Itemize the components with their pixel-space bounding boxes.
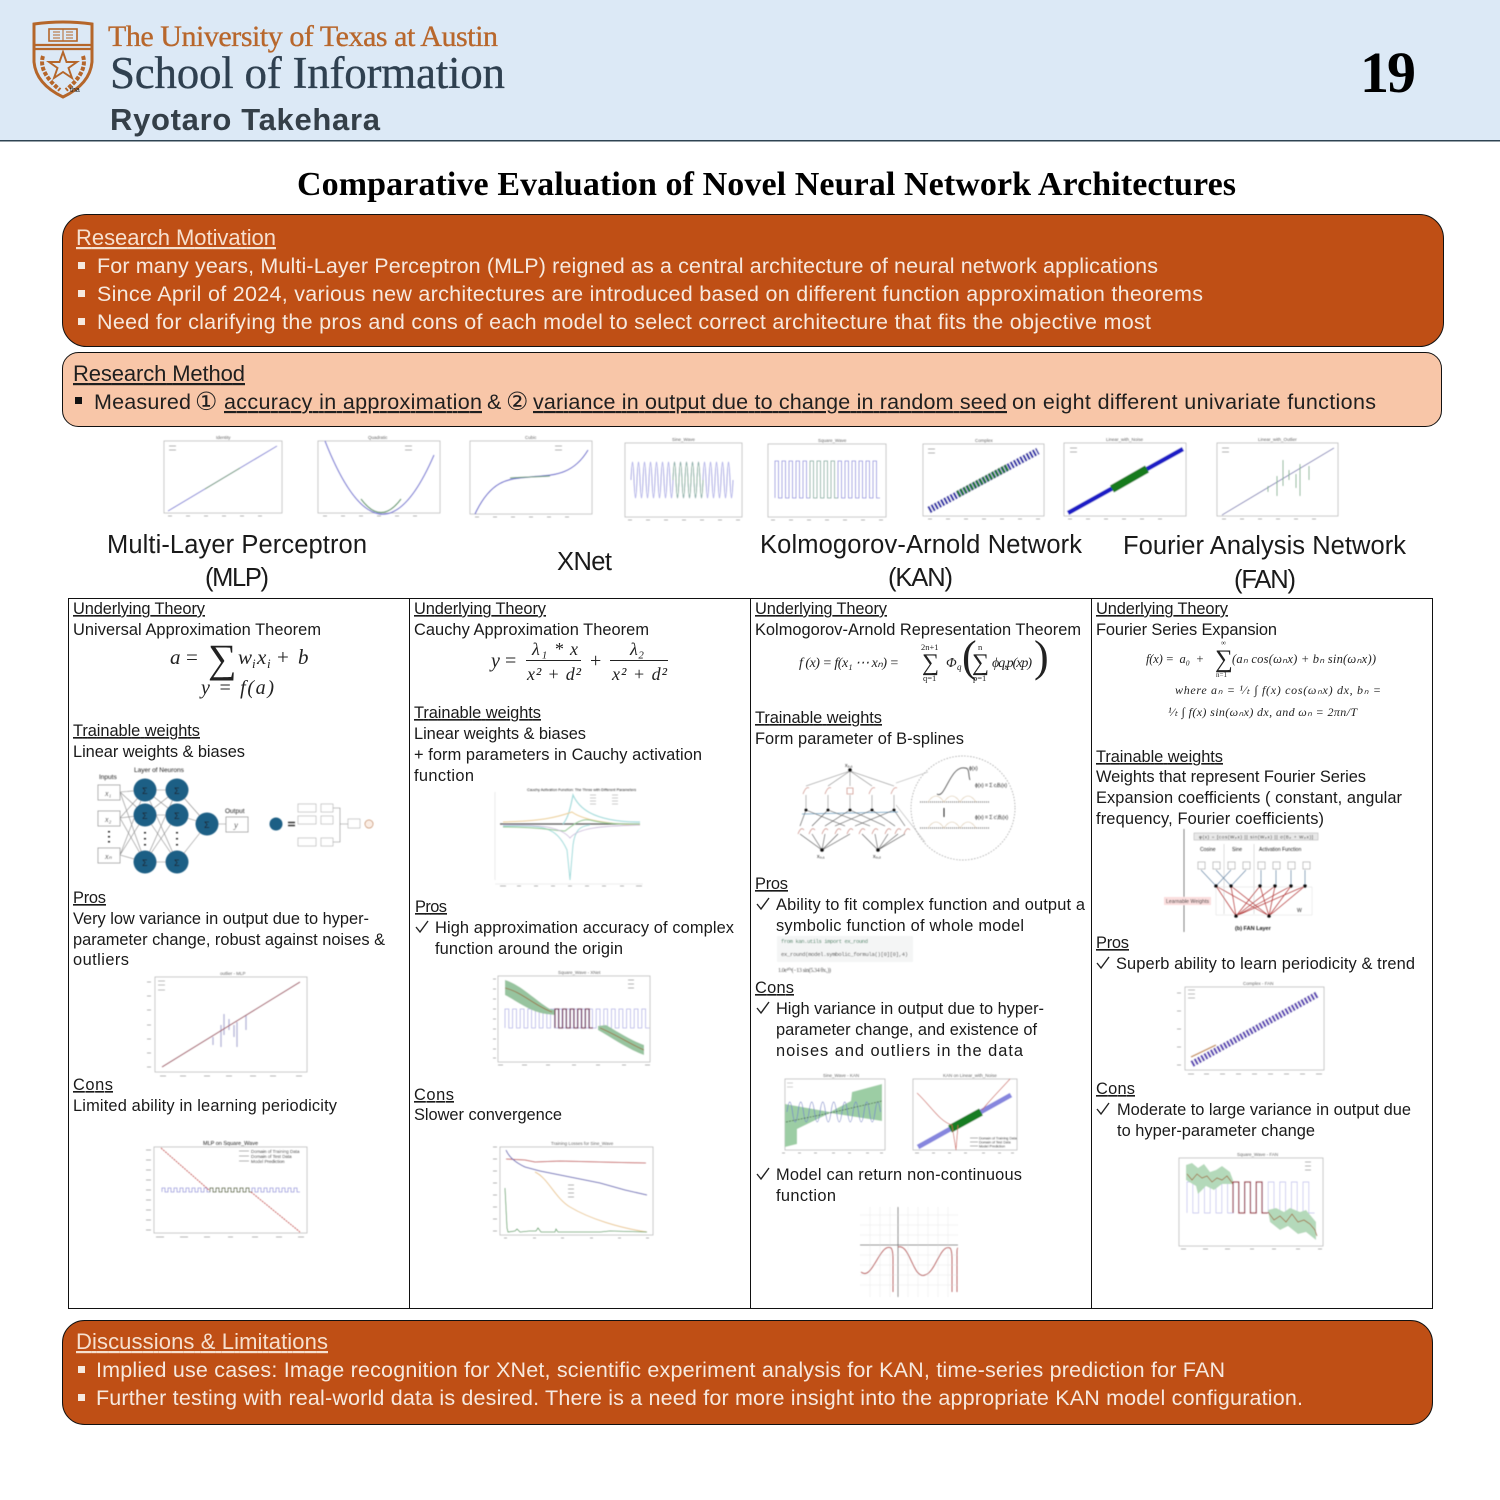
XNet trainable weights: Linear weights & biases — [414, 725, 586, 743]
chart: MLP on square wave: MLP on Square_Wave — [203, 1141, 258, 1147]
FAN trainable weights — [1096, 748, 1403, 828]
KAN formula: f (x) = f(x₁ ⋯ xₙ) = — [799, 656, 899, 671]
FAN underlying theory: Fourier Series Expansion — [1096, 621, 1277, 639]
method statement — [75, 387, 1376, 416]
FAN cons: to hyper-parameter change — [1117, 1122, 1315, 1140]
KAN trainable weights: Trainable weights — [755, 709, 882, 727]
diagram: KAN network with B-spline inset: x₀,₁ — [817, 854, 825, 860]
diagram: FAN layer: φ(x) = [cos(Wₚx) || sin(Wₚx) || σ(Bₚ + Wₚx)] — [1199, 834, 1313, 840]
FAN underlying theory — [1096, 600, 1277, 639]
diagram: MLP network: Σ — [142, 858, 148, 868]
code snippet: from kan.utils import ex_round — [781, 938, 868, 945]
method statement: ② — [506, 387, 528, 416]
chart: KAN on linear with noise: Domain of Training Data — [979, 1136, 1017, 1140]
method statement: Measured — [94, 390, 191, 414]
chart: complex FAN — [1177, 981, 1324, 1074]
KAN second con: Model can return non-continuous — [776, 1166, 1022, 1184]
KAN formula: p=1 — [973, 673, 986, 683]
chart: square wave: Square_Wave — [818, 438, 847, 443]
chart: sine wave — [625, 437, 742, 520]
KAN underlying theory — [755, 600, 1081, 639]
XNet formula: λ₂ — [629, 639, 644, 659]
bullet list: discussions: Implied use cases: Image recognition for XNet, scientific experiment analysis for KAN, time-series prediction for FAN — [96, 1358, 1225, 1382]
bullet list: motivation: Need for clarifying the pros and cons of each model to select correct architecture that fits the objective most — [97, 310, 1151, 334]
KAN formula: Φ — [946, 656, 957, 671]
code snippet: 1.0e¹⁰ˣ(−13 sin(5.34 θx₁)) — [778, 967, 831, 974]
MLP underlying theory — [73, 600, 321, 639]
diagram: KAN network with B-spline inset: ϕ(x) = Σ cᵢBᵢ(x) — [975, 783, 1007, 789]
KAN cons: noises and outliers in the data — [776, 1042, 1024, 1060]
XNet cons: Cons — [414, 1086, 454, 1104]
bullet list: motivation: For many years, Multi-Layer Perceptron (MLP) reigned as a central architecture of neural network applications — [97, 254, 1158, 278]
KAN formula: ∑ — [972, 650, 989, 676]
column: XNet — [414, 600, 735, 1238]
chart: Cauchy activation functions — [495, 788, 643, 886]
panel: research method — [62, 352, 1442, 426]
KAN formula: 2n+1 — [921, 642, 939, 652]
header band — [0, 0, 1500, 142]
diagram: MLP network: Σ — [174, 858, 180, 868]
KAN underlying theory: Kolmogorov-Arnold Representation Theorem — [755, 621, 1081, 639]
FAN cons: Cons — [1096, 1080, 1135, 1098]
heading: research method: Research Method — [73, 361, 245, 386]
chart: quadratic: Quadratic — [368, 435, 388, 440]
KAN formula: q — [957, 662, 962, 672]
XNet pros: High approximation accuracy of complex — [435, 919, 735, 937]
diagram: MLP network: x₁ — [104, 789, 112, 798]
comparison table — [68, 598, 1432, 1309]
chart: sine wave KAN: Sine_Wave - KAN — [823, 1073, 859, 1078]
MLP cons: Cons — [73, 1076, 113, 1094]
school name: School of Information — [110, 48, 505, 98]
chart: outlier MLP — [147, 971, 307, 1076]
heading: MLP — [107, 531, 367, 592]
panel: discussions and limitations — [62, 1320, 1432, 1424]
diagram: MLP network: Σ — [174, 811, 180, 821]
code snippet: ex_round(model.symbolic_formula()[0][0],4) — [781, 951, 908, 958]
KAN cons — [755, 979, 1044, 1060]
KAN cons: parameter change, and existence of — [776, 1021, 1037, 1039]
chart: quadratic — [318, 435, 440, 516]
MLP formula: + — [277, 645, 289, 669]
diagram: FAN layer: Activation Function — [1259, 847, 1301, 853]
KAN formula — [799, 632, 1049, 683]
XNet pros: Pros — [415, 898, 447, 916]
diagram: FAN layer: Sine — [1232, 847, 1242, 853]
chart: Cauchy activation functions: Cauchy Activation Function: The Three with Different Parameters — [527, 788, 636, 792]
column headings — [107, 531, 1406, 594]
MLP formula — [170, 636, 308, 699]
MLP pros: parameter change, robust against noises & — [73, 931, 385, 949]
diagram: MLP network: x₂ — [104, 815, 112, 824]
chart: outlier MLP: outlier - MLP — [220, 971, 246, 976]
diagram: MLP network: Output — [225, 808, 245, 815]
heading: discussions and limitations: Discussions & Limitations — [76, 1329, 328, 1354]
XNet trainable weights: + form parameters in Cauchy activation — [414, 746, 702, 764]
bullet list: motivation: Since April of 2024, various new architectures are introduced based on different function approximation theorems — [97, 282, 1203, 306]
KAN formula: ∑ — [922, 650, 939, 676]
method statement: & — [487, 390, 501, 414]
chart: KAN on linear with noise: Domain of Test Data — [979, 1140, 1011, 1144]
FAN formulas: f(x) = a₀ + — [1146, 652, 1204, 666]
MLP underlying theory: Universal Approximation Theorem — [73, 621, 321, 639]
diagram: MLP network: Inputs — [99, 774, 117, 781]
FAN trainable weights: Trainable weights — [1096, 748, 1223, 766]
MLP pros: Pros — [73, 889, 106, 907]
MLP pros: Very low variance in output due to hyper- — [73, 910, 369, 928]
diagram: MLP network: Σ — [204, 820, 210, 830]
method statement: on eight different univariate functions — [1012, 390, 1376, 414]
XNet formula: x² + d² — [611, 664, 668, 684]
heading: FAN: (FAN) — [1234, 566, 1296, 594]
XNet cons: Slower convergence — [414, 1106, 562, 1124]
diagram: KAN network with B-spline inset: ϕ(x) = Σ c′ⱼBⱼ(x) — [975, 815, 1008, 821]
KAN second con: function — [776, 1187, 836, 1205]
bullet list: discussions: Further testing with real-world data is desired. There is a need for more insight into the appropriate KAN model configuration. — [96, 1386, 1303, 1410]
diagram: FAN layer: (b) FAN Layer — [1235, 926, 1272, 932]
diagram: KAN network with B-spline inset: ϕ(x) — [969, 766, 978, 772]
chart: KAN on linear with noise — [913, 1073, 1017, 1153]
FAN pros: Superb ability to learn periodicity & trend — [1116, 955, 1415, 973]
XNet formula — [489, 639, 668, 684]
diagram: MLP network: xₙ — [104, 852, 113, 861]
MLP formula: b — [298, 645, 308, 669]
XNet trainable weights: Trainable weights — [414, 704, 541, 722]
method statement: variance in output due to change in random seed — [533, 390, 1007, 414]
diagram: MLP network — [98, 767, 373, 874]
chart: linear with outliers: Linear_with_Outlier — [1258, 437, 1297, 442]
XNet pros — [415, 898, 735, 958]
chart: KAN on linear with noise: Model Prediction — [979, 1144, 1005, 1148]
FAN cons: Moderate to large variance in output due — [1117, 1101, 1411, 1119]
KAN pros: Pros — [755, 875, 788, 893]
FAN formulas: ∞ — [1221, 639, 1226, 647]
icon: check mark — [1097, 1103, 1109, 1114]
column: FAN — [1096, 600, 1415, 1249]
chart: linear with noise — [1064, 437, 1186, 519]
MLP formula: = — [186, 645, 198, 669]
MLP trainable weights: Linear weights & biases — [73, 743, 245, 761]
MLP formula: a — [170, 645, 180, 669]
chart: non-continuous function graph — [860, 1207, 958, 1297]
FAN underlying theory: Underlying Theory — [1096, 600, 1229, 618]
KAN cons: High variance in output due to hyper- — [776, 1000, 1044, 1018]
chart: MLP on square wave — [146, 1141, 307, 1237]
KAN formula: n — [978, 642, 983, 652]
diagram: FAN layer — [1164, 829, 1318, 932]
KAN trainable weights: Form parameter of B-splines — [755, 730, 964, 748]
code snippet — [777, 936, 913, 974]
XNet trainable weights: function — [414, 767, 474, 785]
bullet list: motivation — [78, 254, 1203, 334]
FAN formulas: where aₙ = ¹⁄ₜ ∫ f(x) cos(ωₙx) dx, bₙ = — [1175, 683, 1381, 697]
diagram: FAN layer: Cosine — [1200, 847, 1216, 853]
chart: complex: Complex — [975, 438, 994, 443]
chart: complex FAN: Complex - FAN — [1243, 981, 1274, 986]
FAN formulas: ∑ — [1215, 646, 1233, 673]
row of eight target function plots — [164, 435, 1338, 520]
KAN pros — [755, 875, 1086, 935]
MLP cons — [73, 1076, 338, 1115]
XNet formula: = — [505, 650, 516, 672]
XNet formula: λ₁ * x — [531, 639, 578, 659]
chart: training losses — [493, 1141, 653, 1238]
diagram: MLP network: Layer of Neurons — [134, 767, 185, 774]
MLP formula: ∑ — [208, 636, 237, 681]
method statement: accuracy in approximation — [224, 390, 482, 414]
XNet underlying theory: Underlying Theory — [414, 600, 547, 618]
FAN trainable weights: Weights that represent Fourier Series — [1096, 768, 1366, 786]
chart: MLP on square wave: Domain of Test Data — [251, 1154, 292, 1159]
chart: MLP on square wave: Model Prediction — [251, 1159, 285, 1164]
icon: check mark — [416, 921, 428, 932]
chart: linear with noise: Linear_with_Noise — [1106, 437, 1144, 442]
icon: check mark — [757, 898, 769, 909]
chart: complex — [923, 438, 1044, 519]
diagram: FAN layer: Learnable Weights — [1166, 899, 1210, 905]
FAN formulas — [1146, 639, 1381, 719]
FAN trainable weights: frequency, Fourier coefficients) — [1096, 810, 1324, 828]
MLP formula: w — [238, 645, 252, 669]
MLP formula: y = f(a) — [199, 677, 274, 699]
KAN cons: Cons — [755, 979, 794, 997]
heading: MLP: Multi-Layer Perceptron — [107, 531, 367, 559]
icon: check mark — [1097, 957, 1109, 968]
heading: FAN — [1123, 532, 1406, 594]
heading: KAN: Kolmogorov-Arnold Network — [760, 531, 1082, 559]
FAN formulas: (aₙ cos(ωₙx) + bₙ sin(ωₙx)) — [1232, 652, 1376, 666]
KAN pros: Ability to fit complex function and output a — [776, 896, 1086, 914]
MLP underlying theory: Underlying Theory — [73, 600, 206, 618]
chart: sine wave KAN — [782, 1073, 885, 1153]
KAN formula: q=1 — [923, 673, 936, 683]
heading: KAN: (KAN) — [888, 564, 953, 592]
KAN formula: ) — [1034, 632, 1049, 681]
icon: check mark — [757, 1002, 769, 1013]
method statement: ① — [195, 387, 217, 416]
XNet trainable weights — [414, 704, 702, 785]
KAN formula: ϕq,p(xp) — [992, 656, 1032, 671]
XNet formula: y — [489, 650, 500, 672]
MLP trainable weights: Trainable weights — [73, 722, 200, 740]
chart: cubic — [470, 435, 592, 517]
diagram: MLP network: Σ — [142, 811, 148, 821]
FAN pros — [1096, 934, 1415, 973]
XNet formula: + — [590, 650, 601, 672]
chart: KAN on linear with noise: KAN on Linear_with_Noise — [943, 1073, 997, 1078]
panel: research motivation — [62, 214, 1444, 346]
chart: square wave XNet: Square_Wave - XNet — [558, 970, 601, 975]
chart: square wave FAN: Square_Wave - FAN — [1237, 1152, 1278, 1157]
chart: square wave FAN — [1179, 1152, 1323, 1249]
diagram: KAN network with B-spline inset: x₀,₂ — [873, 854, 881, 860]
icon: check mark — [757, 1168, 769, 1179]
chart: linear with outliers — [1217, 437, 1338, 519]
KAN formula: ( — [962, 632, 977, 681]
icon: UT shield logo: tha — [70, 87, 80, 94]
diagram: MLP network: y — [233, 820, 238, 830]
heading: FAN: Fourier Analysis Network — [1123, 532, 1406, 560]
diagram: MLP network: Σ — [174, 786, 180, 796]
chart: MLP on square wave: Domain of Training Data — [251, 1149, 300, 1154]
chart: identity — [164, 435, 282, 516]
MLP formula: i — [252, 656, 256, 671]
XNet underlying theory: Cauchy Approximation Theorem — [414, 621, 649, 639]
MLP formula: i — [267, 656, 271, 671]
FAN pros: Pros — [1096, 934, 1129, 952]
XNet pros: function around the origin — [435, 940, 623, 958]
diagram: KAN network with B-spline inset — [798, 756, 1015, 860]
FAN formulas: ¹⁄ₜ ∫ f(x) sin(ωₙx) dx, and ωₙ = 2πn/T — [1168, 705, 1358, 719]
column: MLP — [73, 600, 385, 1237]
XNet underlying theory — [414, 600, 649, 639]
poster number: 19 — [1360, 40, 1416, 105]
KAN trainable weights — [755, 709, 964, 748]
column: KAN — [755, 600, 1086, 1297]
FAN trainable weights: Expansion coefficients ( constant, angular — [1096, 789, 1403, 807]
MLP pros — [73, 889, 385, 969]
chart: cubic: Cubic — [525, 435, 537, 440]
chart: identity: Identity — [216, 435, 231, 440]
XNet formula: x² + d² — [526, 664, 582, 684]
heading: MLP: (MLP) — [205, 564, 269, 592]
title: Comparative Evaluation of Novel Neural Network Architectures — [297, 166, 1236, 203]
author name: Ryotaro Takehara — [110, 102, 381, 137]
KAN second con — [757, 1166, 1022, 1205]
bullet list: discussions — [78, 1358, 1303, 1410]
chart: sine wave: Sine_Wave — [672, 437, 695, 442]
MLP cons: Limited ability in learning periodicity — [73, 1097, 338, 1115]
MLP formula: x — [256, 645, 267, 669]
XNet cons — [414, 1086, 562, 1124]
MLP trainable weights — [73, 722, 245, 761]
icon: UT shield logo — [34, 22, 92, 97]
MLP pros: outliers — [73, 951, 129, 969]
chart: square wave XNet — [493, 970, 650, 1065]
diagram: FAN layer: W — [1297, 908, 1302, 914]
university name: The University of Texas at Austin — [108, 20, 498, 53]
chart: square wave — [768, 438, 886, 520]
heading: KAN — [760, 531, 1082, 592]
heading: XNet: XNet — [557, 548, 612, 576]
FAN cons — [1096, 1080, 1411, 1140]
FAN formulas: n=1 — [1216, 671, 1227, 679]
diagram: KAN network with B-spline inset: x₂,₁ — [845, 763, 853, 769]
chart: training losses: Training Losses for Sine_Wave — [551, 1141, 614, 1146]
KAN underlying theory: Underlying Theory — [755, 600, 888, 618]
diagram: MLP network: Σ — [142, 786, 148, 796]
KAN pros: symbolic function of whole model — [776, 917, 1024, 935]
heading: research motivation: Research Motivation — [76, 225, 276, 250]
